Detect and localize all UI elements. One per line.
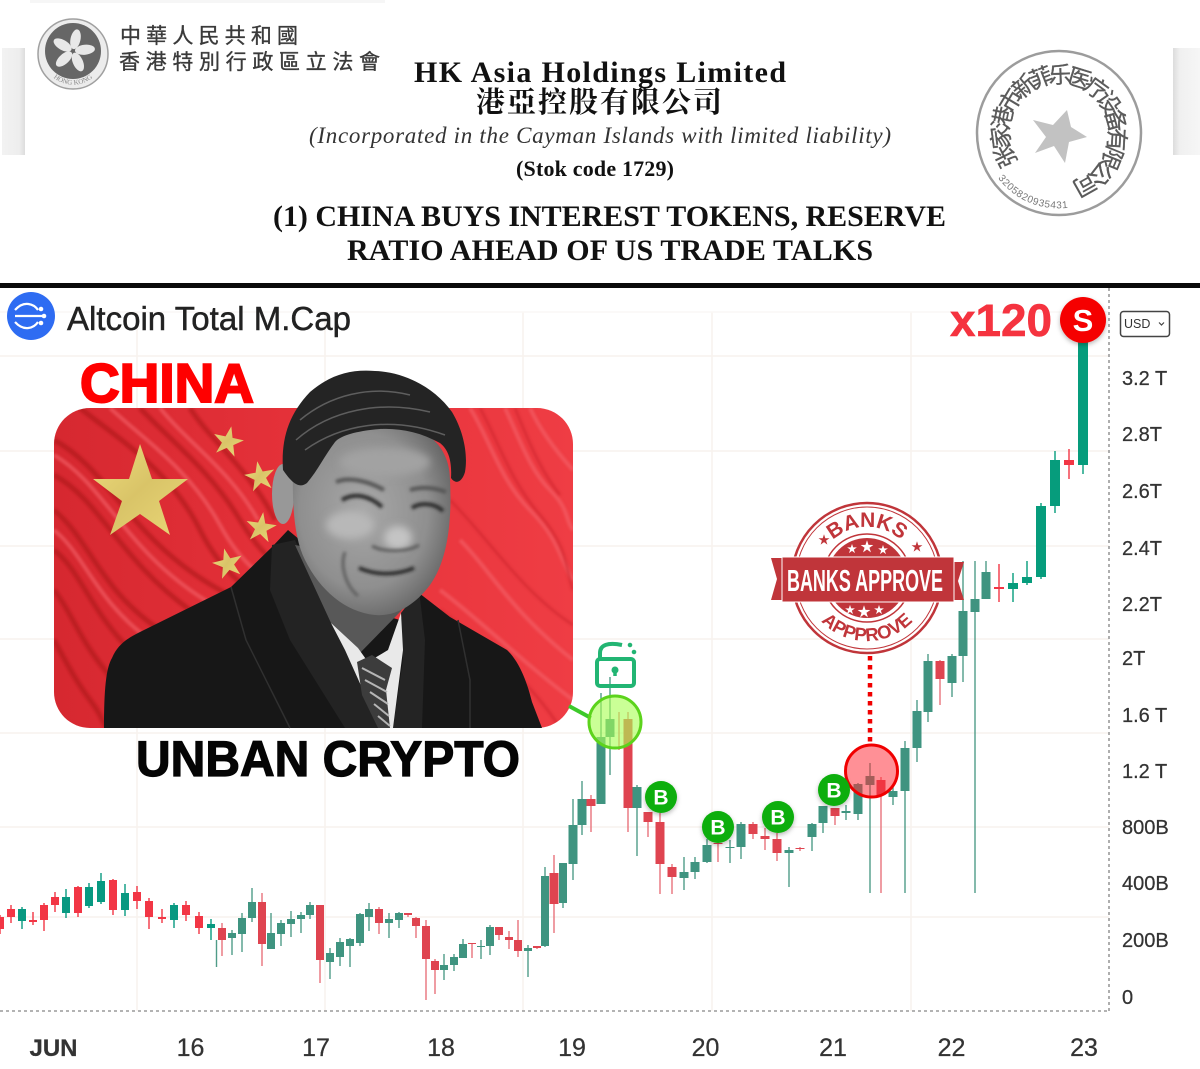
buy badge 4 bbox=[818, 774, 850, 806]
chart title bbox=[7, 292, 351, 340]
face bbox=[293, 425, 450, 615]
icon: Hong Kong emblem bbox=[37, 18, 109, 90]
buy badge 1 bbox=[645, 781, 677, 813]
headline: (1) CHINA BUYS INTEREST TOKENS, RESERVE bbox=[273, 200, 946, 233]
tie bbox=[357, 655, 392, 728]
red highlight marker bbox=[846, 745, 898, 797]
incorporation line: (Incorporated in the Cayman Islands with limited liability) bbox=[309, 123, 891, 148]
buy badge 4: B bbox=[826, 780, 842, 802]
legislative council name: 中華人民共和國 bbox=[120, 25, 298, 48]
scarf and lapels bbox=[231, 540, 470, 728]
sell signal badge bbox=[1060, 297, 1106, 343]
candlestick chart bbox=[0, 340, 1088, 1000]
date axis labels: 16 bbox=[177, 1034, 204, 1062]
USD currency selector: USD bbox=[1124, 317, 1150, 331]
icon: open lock bbox=[597, 643, 636, 686]
coat bbox=[104, 530, 542, 728]
x120 callout: x120 bbox=[950, 295, 1052, 346]
price axis labels: 2.6T bbox=[1122, 481, 1162, 503]
company seal: 张家港市新菲乐医疗设备有限公司 bbox=[990, 64, 1128, 198]
photo panel: flag with portrait bbox=[54, 371, 573, 728]
stamp ribbon bbox=[771, 557, 964, 602]
buy badge 3: B bbox=[770, 806, 786, 830]
date axis labels: 23 bbox=[1070, 1034, 1098, 1062]
banks approve stamp bbox=[771, 502, 964, 654]
date axis labels: JUN bbox=[29, 1035, 78, 1062]
stamp arc text: BANKS bbox=[826, 512, 907, 539]
section divider bbox=[0, 283, 1200, 288]
stamp stars bbox=[819, 534, 922, 617]
date axis labels: 19 bbox=[558, 1034, 586, 1062]
buy badge 3 bbox=[762, 801, 794, 833]
legislative council name bbox=[119, 25, 380, 74]
top scan edge bbox=[30, 0, 385, 3]
company name English: HK Asia Holdings Limited bbox=[414, 56, 786, 89]
middle green candles bbox=[216, 561, 990, 980]
ear bbox=[272, 464, 294, 524]
title text: Altcoin Total M.Cap bbox=[67, 300, 351, 337]
USD currency selector bbox=[1120, 312, 1170, 336]
portrait figure bbox=[104, 371, 542, 728]
left green candles bbox=[18, 873, 215, 940]
price axis labels: 0 bbox=[1122, 987, 1133, 1009]
hair highlights bbox=[296, 391, 445, 450]
right scan bar bbox=[1173, 48, 1200, 155]
legislative council name: 香港特別行政區立法會 bbox=[119, 51, 380, 74]
price axis labels: 2T bbox=[1122, 648, 1145, 670]
stamp ribbon: BANKS APPROVE bbox=[787, 563, 943, 598]
buy badge 1: B bbox=[653, 786, 669, 810]
price axis labels: 200B bbox=[1122, 930, 1169, 952]
company seal: 3205820935431 bbox=[998, 174, 1068, 208]
tie pattern bbox=[362, 668, 390, 726]
buy signal badges bbox=[645, 774, 850, 843]
price axis labels: 2.8T bbox=[1122, 424, 1162, 446]
company name Chinese: 港亞控股有限公司 bbox=[476, 86, 722, 119]
price axis labels: 400B bbox=[1122, 873, 1169, 895]
chart grid bbox=[0, 312, 1109, 1011]
neck bbox=[295, 545, 432, 655]
price axis labels: 3.2 T bbox=[1122, 368, 1167, 390]
stock code: (Stok code 1729) bbox=[516, 156, 674, 181]
chart axes dotted borders bbox=[0, 288, 1109, 1011]
letterhead bbox=[2, 0, 1200, 267]
price axis labels: 800B bbox=[1122, 817, 1169, 839]
icon: large flag star bbox=[93, 444, 188, 535]
middle red candles bbox=[218, 660, 944, 1000]
facial highlights bbox=[326, 448, 430, 550]
headline: RATIO AHEAD OF US TRADE TALKS bbox=[347, 234, 873, 267]
flag background bbox=[54, 408, 573, 728]
sell signal badge: S bbox=[1073, 303, 1093, 338]
icon: small flag stars bbox=[209, 423, 278, 580]
shirt bbox=[331, 613, 403, 728]
date axis labels: 20 bbox=[692, 1034, 719, 1062]
left scan bar bbox=[2, 48, 25, 155]
green highlight marker bbox=[589, 696, 641, 748]
CHINA heading: CHINA bbox=[80, 352, 254, 414]
stamp lower arc text: APPPROVE bbox=[821, 612, 913, 642]
hair bbox=[283, 371, 466, 485]
right red candles bbox=[994, 449, 1074, 602]
date axis labels: 18 bbox=[427, 1034, 455, 1062]
price axis labels: 1.6 T bbox=[1122, 705, 1167, 727]
facial features bbox=[336, 480, 446, 596]
icon: Hong Kong emblem: HONG KONG bbox=[54, 74, 92, 85]
left red candles bbox=[0, 879, 203, 934]
UNBAN CRYPTO caption: UNBAN CRYPTO bbox=[136, 731, 520, 787]
buy badge 2 bbox=[702, 811, 734, 843]
buy badge 2: B bbox=[710, 816, 726, 840]
dotted connector from stamp to red marker bbox=[868, 656, 872, 745]
price axis labels bbox=[1122, 368, 1169, 1009]
headline bbox=[273, 200, 946, 267]
price axis labels: 1.2 T bbox=[1122, 761, 1167, 783]
price axis labels: 2.2T bbox=[1122, 594, 1162, 616]
price axis labels: 2.4T bbox=[1122, 538, 1162, 560]
date axis labels bbox=[29, 1034, 1098, 1062]
date axis labels: 17 bbox=[302, 1034, 330, 1062]
date axis labels: 22 bbox=[938, 1034, 965, 1062]
icon: altcoin index logo bbox=[7, 292, 55, 340]
right green candles bbox=[1008, 340, 1088, 602]
date axis labels: 21 bbox=[819, 1034, 847, 1062]
connector to green marker bbox=[569, 706, 591, 718]
